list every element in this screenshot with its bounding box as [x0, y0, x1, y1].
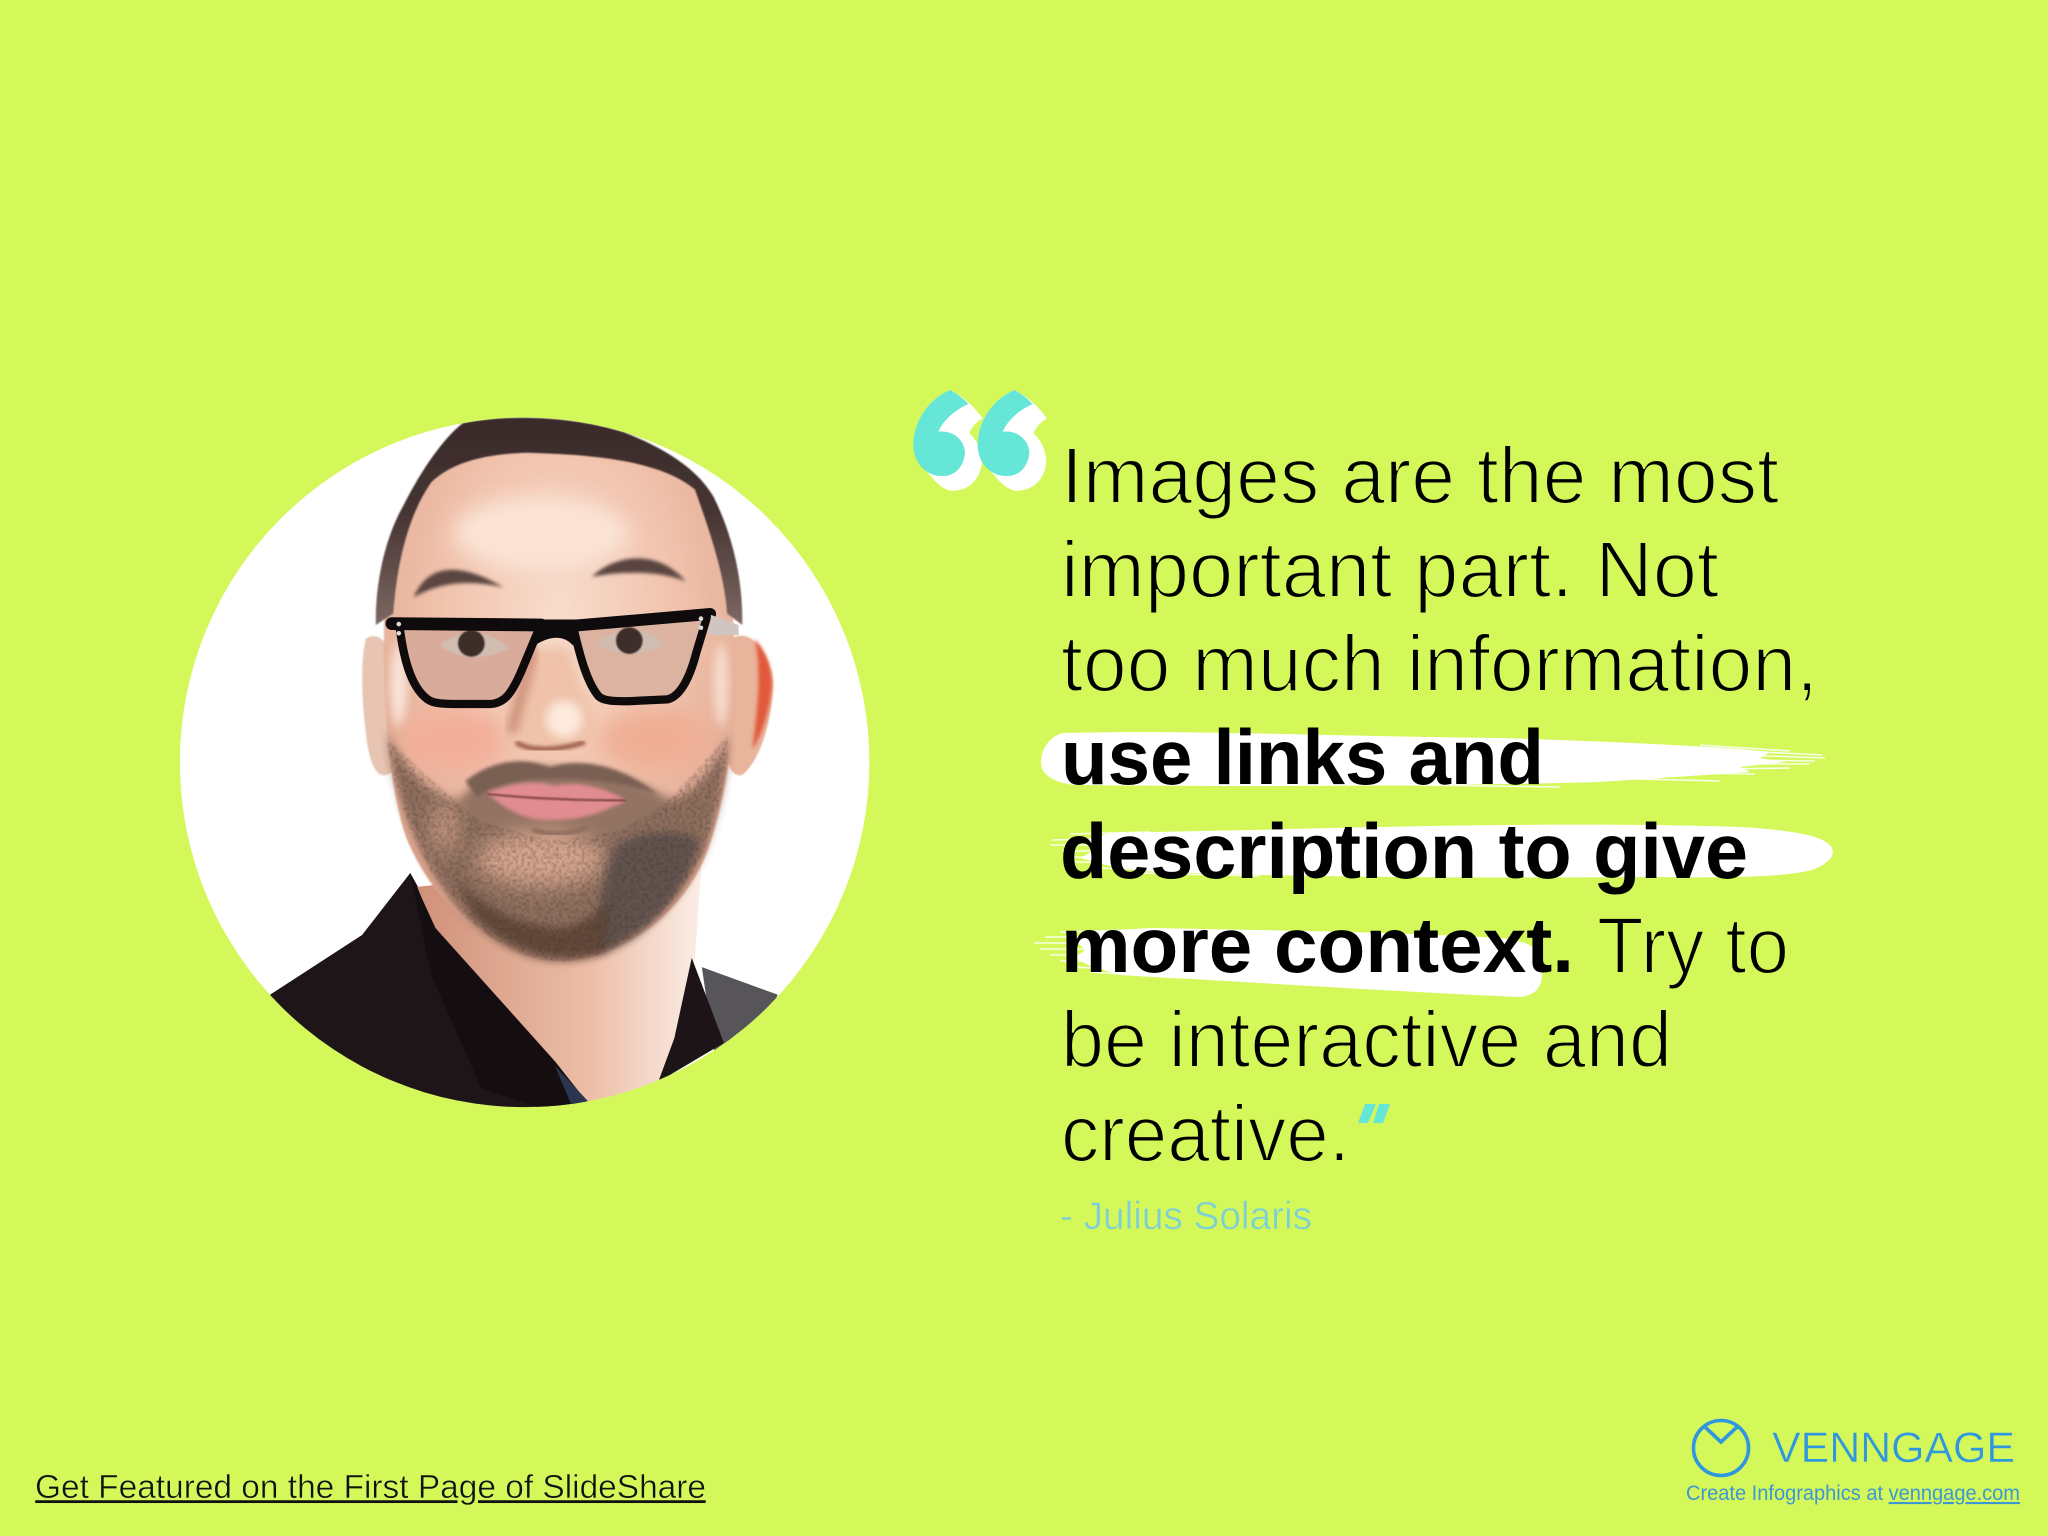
- pale cheek edges: [391, 643, 407, 726]
- neck and chest: [417, 859, 702, 1107]
- moustache: [465, 761, 658, 797]
- chin skin patch: [477, 832, 605, 887]
- eyebrows: [413, 570, 503, 597]
- beard stubble speckle: [387, 735, 728, 961]
- lips: [487, 783, 626, 820]
- icon: logo circle: [1694, 1420, 1748, 1476]
- quote text: Images are the most: [1061, 431, 1779, 520]
- quote text: too much information,: [1061, 619, 1818, 708]
- portrait photo of Julius Solaris: [180, 417, 869, 1135]
- ears: [362, 636, 392, 775]
- cheek colour: [414, 708, 506, 766]
- glasses: [392, 614, 710, 704]
- quote text: be interactive and: [1061, 995, 1672, 1084]
- beard: [387, 731, 728, 961]
- white brush highlight 3: [1034, 928, 1542, 997]
- opening quotation mark icon: [913, 390, 1047, 491]
- quote text: creative.: [1061, 1089, 1350, 1178]
- quote text: Try to: [1597, 901, 1789, 990]
- quote text: description to give: [1060, 807, 1748, 895]
- logo wordmark: VENNGAGE: [1772, 1424, 2015, 1472]
- face: [384, 446, 735, 961]
- dark shirt: [658, 958, 724, 1082]
- quote text: more context.: [1061, 901, 1574, 989]
- white brush highlight 1: [1041, 732, 1825, 787]
- quote text: [1060, 431, 1818, 1178]
- eyes: [440, 633, 509, 657]
- beard darker goatee and lower edge: [596, 832, 700, 953]
- white brush highlight 2: [1050, 825, 1833, 877]
- nose: [520, 646, 592, 745]
- quote text: important part. Not: [1061, 525, 1719, 614]
- Venngage logo: [1686, 1420, 2020, 1505]
- jacket: [270, 873, 584, 1108]
- footer link: Get Featured on the First Page of SlideShare: [35, 1468, 706, 1505]
- hair: [376, 418, 742, 625]
- logo tagline: Create Infographics at venngage.com: [1686, 1482, 2020, 1505]
- closing quotation mark icon: [1358, 1104, 1390, 1123]
- lens tint: [404, 630, 534, 700]
- glasses bridge: [534, 619, 576, 646]
- attribution: - Julius Solaris: [1060, 1195, 1312, 1238]
- forehead highlight: [454, 496, 628, 570]
- quote text: use links and: [1061, 713, 1544, 801]
